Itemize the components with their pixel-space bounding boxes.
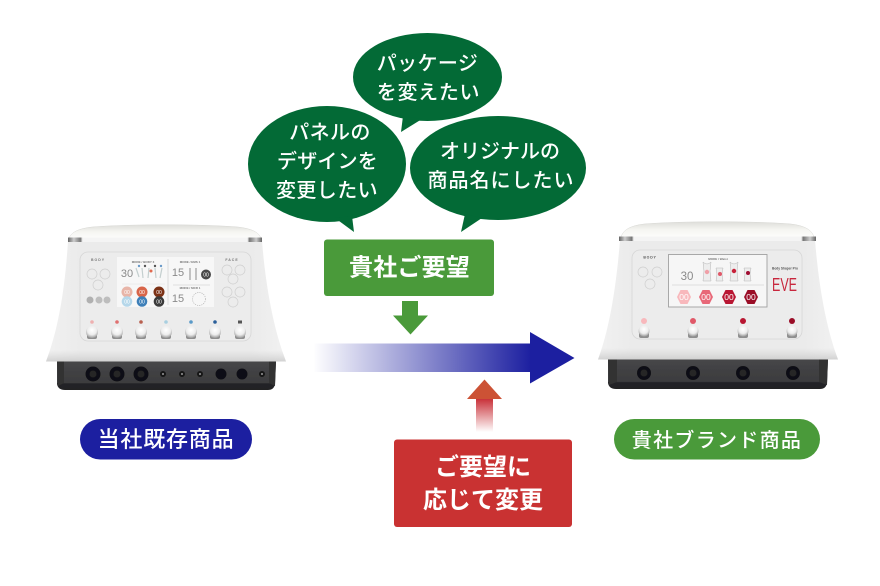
- product: branded machine: 00: [701, 292, 711, 302]
- product: existing machine: 00: [139, 290, 145, 296]
- machine body: [46, 241, 286, 362]
- product: existing machine: 00: [124, 290, 130, 296]
- label: branded product: [614, 419, 820, 460]
- product: branded machine: MODE / Waist: [708, 257, 728, 261]
- product: existing machine: 00: [124, 300, 130, 306]
- request box: 貴社ご要望: [349, 254, 470, 282]
- product: existing machine: 00: [156, 290, 162, 296]
- product: existing machine: [46, 225, 286, 390]
- side controls: BODY: [643, 256, 657, 260]
- product: branded machine: [598, 222, 838, 389]
- product: branded machine: 00: [679, 292, 689, 302]
- product: branded machine: 00: [724, 292, 734, 302]
- speech bubble: package: パッケージ: [377, 52, 478, 75]
- product: existing machine: 30: [121, 268, 133, 280]
- machine body: [598, 240, 838, 360]
- product: existing machine: MODE / EMS 1: [180, 260, 201, 264]
- product: existing machine: 00: [139, 300, 145, 306]
- machine lid: [620, 222, 815, 240]
- screen: [117, 257, 214, 307]
- side controls: BODY: [91, 258, 105, 262]
- control panel: [80, 252, 251, 341]
- control panel: [632, 250, 802, 339]
- speech bubble: panel design: デザインを: [277, 149, 378, 173]
- brand label: Body Shaper Pro: [772, 266, 798, 270]
- product: existing machine: 00: [156, 300, 162, 306]
- product: branded machine: EVE: [772, 275, 797, 295]
- product: existing machine: MODE / BODY 3: [132, 260, 155, 264]
- speech bubble: product name: 商品名にしたい: [428, 169, 574, 192]
- machine lid: [68, 225, 262, 241]
- label: branded product: 貴社ブランド商品: [632, 428, 802, 452]
- speech bubble: product name: オリジナルの: [440, 141, 560, 163]
- speech bubble: panel design: [248, 106, 406, 232]
- speech bubble: panel design: パネルの: [289, 121, 371, 144]
- jacks: [86, 366, 100, 382]
- speech bubble: panel design: 変更したい: [276, 179, 378, 202]
- product: branded machine: 30: [681, 271, 693, 283]
- arrow: request down: [393, 301, 428, 334]
- change box: 応じて変更: [423, 487, 543, 514]
- product: existing machine: 15: [172, 293, 184, 305]
- product: existing machine: 00: [203, 272, 209, 278]
- change box: [394, 440, 572, 527]
- knobs: [90, 320, 94, 324]
- change box: ご要望に: [435, 453, 531, 481]
- speech bubble: package: を変えたい: [377, 81, 480, 104]
- speech bubble: product name: [410, 116, 586, 232]
- product: existing machine: FACE: [225, 258, 239, 262]
- product: branded machine: 00: [746, 292, 756, 302]
- arrow: main process: [313, 332, 574, 384]
- request box: [324, 240, 494, 296]
- jacks: [637, 366, 651, 380]
- product: existing machine: MODE / MCR 1: [180, 286, 201, 290]
- machine base: [608, 360, 828, 389]
- knobs: [641, 318, 647, 324]
- label: existing product: [80, 419, 252, 460]
- machine base: [57, 362, 276, 390]
- screen: [668, 254, 767, 307]
- label: existing product: 当社既存商品: [98, 427, 234, 452]
- speech bubble: package: [353, 33, 502, 132]
- product: existing machine: 15: [172, 267, 184, 279]
- arrow: change up: [467, 380, 502, 432]
